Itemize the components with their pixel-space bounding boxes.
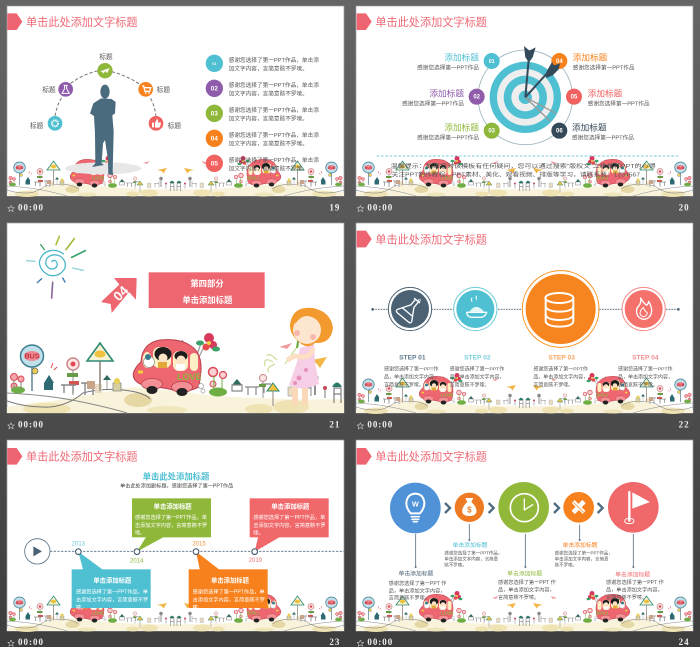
- icon: money bag: $: [467, 506, 472, 515]
- ribbon arrow 04: [101, 278, 137, 313]
- step 3 icon: database: [522, 271, 599, 347]
- years: 2014: [130, 558, 144, 564]
- callout 2013: [72, 552, 151, 611]
- step labels: 单击添加标题: [507, 570, 542, 578]
- centre heading: 单击此处添加副标题，感谢您选择了第一PPT作品: [120, 482, 233, 490]
- title: 单击此处添加文字标题: [375, 450, 487, 464]
- timeline nodes: [75, 549, 257, 554]
- slide 22 content: [357, 231, 690, 430]
- numbered list: 04: [211, 136, 218, 143]
- chevrons: [445, 503, 603, 513]
- icon: clock: [498, 482, 549, 533]
- step labels: 单击添加标题: [615, 570, 650, 578]
- step descriptions: 言简意赅不罗嗦。: [533, 381, 573, 388]
- note with dashed rule: [377, 156, 680, 179]
- large step descriptions: 言简意赅不罗嗦。: [389, 594, 430, 602]
- step descriptions: 感谢您选择了第一PPT作: [450, 366, 504, 373]
- target labels: 添加标题: [572, 122, 607, 133]
- step descriptions: 言简意赅不罗嗦。: [450, 381, 490, 388]
- arc labels: 标题: [42, 85, 56, 94]
- large step descriptions: 感谢您选择了第一PPT 作: [498, 578, 556, 586]
- slide 23 content: [7, 448, 344, 647]
- footer bar: 00:00: [367, 637, 393, 647]
- numbered list: 感谢您选择了第一PPT作品，单击添: [229, 156, 319, 164]
- target diagram: [478, 50, 573, 145]
- footer bar: 21: [329, 420, 340, 430]
- arc labels: 标题: [30, 121, 44, 130]
- numbered circles: 05: [571, 95, 578, 101]
- step descriptions: 言简意赅不罗嗦。: [618, 381, 658, 388]
- step 1 icon: flask: [388, 287, 432, 331]
- footer scenery: [7, 591, 344, 632]
- callout 2013: 感谢您选择了第一PPT作品，单: [76, 587, 148, 595]
- section box: [149, 272, 265, 308]
- numbered circles: 06: [556, 129, 563, 135]
- numbered circles: 03: [488, 129, 496, 135]
- slide 19 content: [7, 13, 340, 212]
- footer bar: 00:00: [367, 420, 393, 430]
- target labels: 添加标题: [588, 88, 623, 99]
- callout 2015: 击添加文字内容，言简意赅不罗: [193, 595, 265, 603]
- title tag: [357, 448, 372, 465]
- section box: 单击添加标题: [182, 295, 233, 305]
- arc labels: [30, 52, 181, 130]
- step descriptions: 品，单击添加文字内容，: [618, 374, 673, 381]
- title tag: [7, 448, 22, 465]
- centre heading: [120, 471, 233, 490]
- numbered list: 03: [211, 111, 218, 118]
- numbered circles: 04: [556, 59, 563, 65]
- target labels: 添加标题: [444, 51, 479, 62]
- small step descriptions: [444, 549, 613, 568]
- callout 2019: 单击添加标题: [271, 501, 310, 510]
- footer bar: 23: [329, 637, 340, 647]
- numbered list: [206, 55, 319, 172]
- numbered list: 感谢您选择了第一PPT作品，单击添: [229, 81, 319, 89]
- callout 2014: 单击添加标题: [154, 501, 192, 510]
- target labels: 添加标题: [444, 122, 479, 133]
- section box: 第四部分: [190, 278, 224, 288]
- small step descriptions: 感谢您选择了第一PPT作品，: [444, 549, 502, 556]
- step descriptions: 品，单击添加文字内容，: [450, 374, 504, 381]
- step labels: 单击添加标题: [563, 541, 598, 549]
- step descriptions: 言简意赅不罗嗦。: [384, 381, 424, 388]
- callout 2013: 嗦。: [76, 603, 86, 611]
- panel: slide 22: [356, 223, 693, 430]
- title tag: [357, 13, 372, 30]
- numbered list: 加文字内容，言简意赅不罗嗦。: [229, 89, 308, 97]
- numbered circles: 02: [473, 95, 481, 101]
- numbered list: 02: [211, 86, 218, 93]
- years: 2019: [249, 558, 263, 564]
- panel: slide 20: [356, 6, 693, 212]
- callout 2019: 嗦。: [253, 529, 264, 537]
- callout 2015: [189, 552, 268, 611]
- footer bar: [357, 202, 690, 212]
- panel: slide 23: [7, 440, 344, 647]
- large step descriptions: 品，单击添加文字内容，: [498, 586, 555, 594]
- small step descriptions: 赅不罗嗦。: [555, 561, 577, 568]
- step labels: 单击添加标题: [453, 541, 488, 549]
- years: 2015: [192, 542, 206, 548]
- target labels: 添加标题: [573, 51, 608, 62]
- numbered circles: 01: [489, 59, 495, 65]
- callout 2014: 击添加文字内容，言简意赅不罗: [135, 521, 207, 529]
- footer bar: 20: [679, 202, 690, 212]
- large step descriptions: 品，单击添加文字内容，: [389, 587, 445, 595]
- large scenery: [7, 333, 344, 415]
- numbered list: 加文字内容，言简意赅不罗嗦。: [229, 139, 308, 147]
- step headings: STEP 03: [548, 354, 575, 361]
- numbered list: 加文字内容，言简意赅不罗嗦。: [229, 164, 308, 172]
- slide 21 content: [8, 236, 340, 430]
- sun: [27, 236, 85, 298]
- target sublabels: 感谢您选择第一PPT作品: [417, 133, 479, 141]
- title: 单击此处添加文字标题: [375, 15, 487, 29]
- icon: pencil and ruler: [563, 492, 594, 523]
- icon: light bulb: [390, 483, 441, 533]
- small step descriptions: 单击添加文字内容，言简意: [555, 555, 609, 562]
- large step descriptions: [389, 578, 664, 602]
- step descriptions: 品，单击添加文字内容，: [533, 374, 588, 381]
- step descriptions: 感谢您选择了第一PPT作: [384, 366, 439, 373]
- connectors: [415, 524, 634, 568]
- title tag: [357, 231, 372, 247]
- footer bar: 19: [329, 202, 340, 212]
- large step descriptions: 品，单击添加文字内容，: [606, 586, 663, 594]
- target sublabels: 感谢您选择第一PPT作品: [572, 133, 634, 141]
- large step descriptions: 言简意赅不罗嗦。: [498, 593, 539, 601]
- step headings: STEP 02: [464, 354, 491, 361]
- callout 2019: 感谢您选择了第一PPT作品，单: [253, 513, 325, 521]
- target sublabels: 感谢您选择第一PPT作品: [588, 100, 650, 108]
- step headings: [399, 354, 659, 361]
- step labels: 单击添加标题: [399, 570, 434, 578]
- icon: money bag: [455, 493, 484, 522]
- step descriptions: 感谢您选择了第一PPT作: [533, 366, 588, 373]
- callout 2013: 击添加文字内容，言简意赅不罗: [76, 595, 148, 603]
- callout 2015: 感谢您选择了第一PPT作品，单: [193, 587, 265, 595]
- numbered list: 05: [211, 161, 218, 168]
- target sublabels: 感谢您选择第一PPT作品: [402, 100, 464, 108]
- footer bar: [8, 637, 340, 647]
- footer bar: 00:00: [18, 202, 44, 212]
- timeline: [25, 539, 344, 564]
- step descriptions: [384, 366, 673, 388]
- callout 2019: [250, 498, 329, 552]
- step headings: STEP 04: [632, 354, 659, 361]
- numbered list: 01: [212, 62, 216, 66]
- arc icons: [48, 63, 163, 131]
- callout 2015: 单击添加标题: [211, 575, 250, 584]
- darts: [524, 46, 560, 97]
- footer bar: [8, 420, 340, 430]
- title: 单击此处添加文字标题: [26, 15, 138, 29]
- dashed axis: [371, 308, 680, 311]
- footer bar: 22: [679, 420, 690, 430]
- years: [72, 542, 263, 564]
- step descriptions: 品，单击添加文字内容，: [384, 374, 439, 381]
- numbered list: 感谢您选择了第一PPT作品，单击添: [229, 106, 319, 114]
- title tag: [7, 13, 22, 30]
- centre heading: 单击此处添加标题: [143, 471, 210, 481]
- large step descriptions: 感谢您选择了第一PPT 作: [606, 578, 664, 586]
- footer bar: [357, 420, 690, 430]
- small step descriptions: 赅不罗嗦。: [444, 561, 467, 568]
- title: 单击此处添加文字标题: [375, 232, 487, 246]
- slide 24 content: [357, 448, 690, 647]
- ribbon arrow 04: 04: [110, 282, 132, 304]
- arc labels: 标题: [168, 121, 181, 130]
- target sublabels: 感谢您选择第一PPT作品: [573, 63, 635, 71]
- small step descriptions: 感谢您选择了第一PPT作品，: [555, 549, 613, 556]
- target labels: 添加标题: [429, 88, 464, 99]
- footer bar: [357, 637, 690, 647]
- step 2 icon: bowl: [454, 287, 497, 331]
- footer scenery: [7, 156, 344, 197]
- numbered list: 加文字内容，言简意赅不罗嗦。: [229, 64, 308, 72]
- callout 2013: 单击添加标题: [93, 575, 132, 584]
- target sublabels: 感谢您选择第一PPT作品: [417, 63, 479, 71]
- callout 2014: [132, 498, 211, 552]
- note with dashed rule: 温馨提示：如果您对该模板有任何疑问，您可以通过搜索“版权文”二维推荐PPT的心得: [391, 162, 656, 170]
- callout 2019: 击添加文字内容，言简意赅不罗: [253, 521, 326, 529]
- footer scenery: [356, 373, 693, 414]
- note with dashed rule: 关注PPT制作教程、PPT素材、美化、观看视频、排版等学习，请联系我：1234567: [392, 171, 640, 179]
- step headings: STEP 01: [399, 354, 426, 361]
- large step descriptions: 感谢您选择了第一PPT 作: [389, 579, 446, 587]
- girl: [265, 308, 333, 405]
- icon: light bulb: W: [412, 500, 419, 509]
- target labels: [429, 51, 623, 133]
- icon: flag: [608, 482, 659, 533]
- title: 单击此处添加文字标题: [26, 450, 138, 464]
- arc labels: 标题: [157, 85, 170, 94]
- numbered list: 感谢您选择了第一PPT作品，单击添: [229, 131, 319, 139]
- numbered list: 感谢您选择了第一PPT作品，单击添: [229, 56, 319, 64]
- target sublabels: [402, 63, 650, 141]
- numbered list: 加文字内容，言简意赅不罗嗦。: [229, 114, 308, 122]
- callout 2015: 嗦。: [193, 603, 203, 611]
- slide 20 content: [357, 13, 690, 212]
- numbered circles: [469, 53, 582, 139]
- footer bar: 00:00: [18, 420, 44, 430]
- step descriptions: 感谢您选择了第一PPT作: [618, 366, 673, 373]
- small step descriptions: 单击添加文字内容，言简意: [444, 555, 499, 562]
- step 4 icon: flame: [622, 287, 665, 331]
- panel: slide 21: [7, 223, 344, 430]
- step labels: [399, 541, 650, 578]
- callout 2014: 嗦。: [135, 529, 145, 537]
- footer scenery: [356, 591, 693, 632]
- callout 2014: 感谢您选择了第一PPT作品，单: [135, 513, 207, 521]
- footer bar: 24: [679, 637, 690, 647]
- large step descriptions: 言简意赅不罗嗦。: [606, 593, 647, 601]
- footer bar: 00:00: [367, 202, 393, 212]
- dashed arc: [55, 71, 156, 117]
- footer bar: 00:00: [18, 637, 44, 647]
- panel: slide 24: [356, 440, 693, 647]
- years: 2013: [72, 542, 86, 548]
- arc labels: 标题: [99, 52, 113, 61]
- footer bar: [8, 202, 340, 212]
- footer scenery: [356, 156, 693, 197]
- panel: slide 19: [7, 6, 344, 212]
- person silhouette with shadow: [65, 85, 141, 175]
